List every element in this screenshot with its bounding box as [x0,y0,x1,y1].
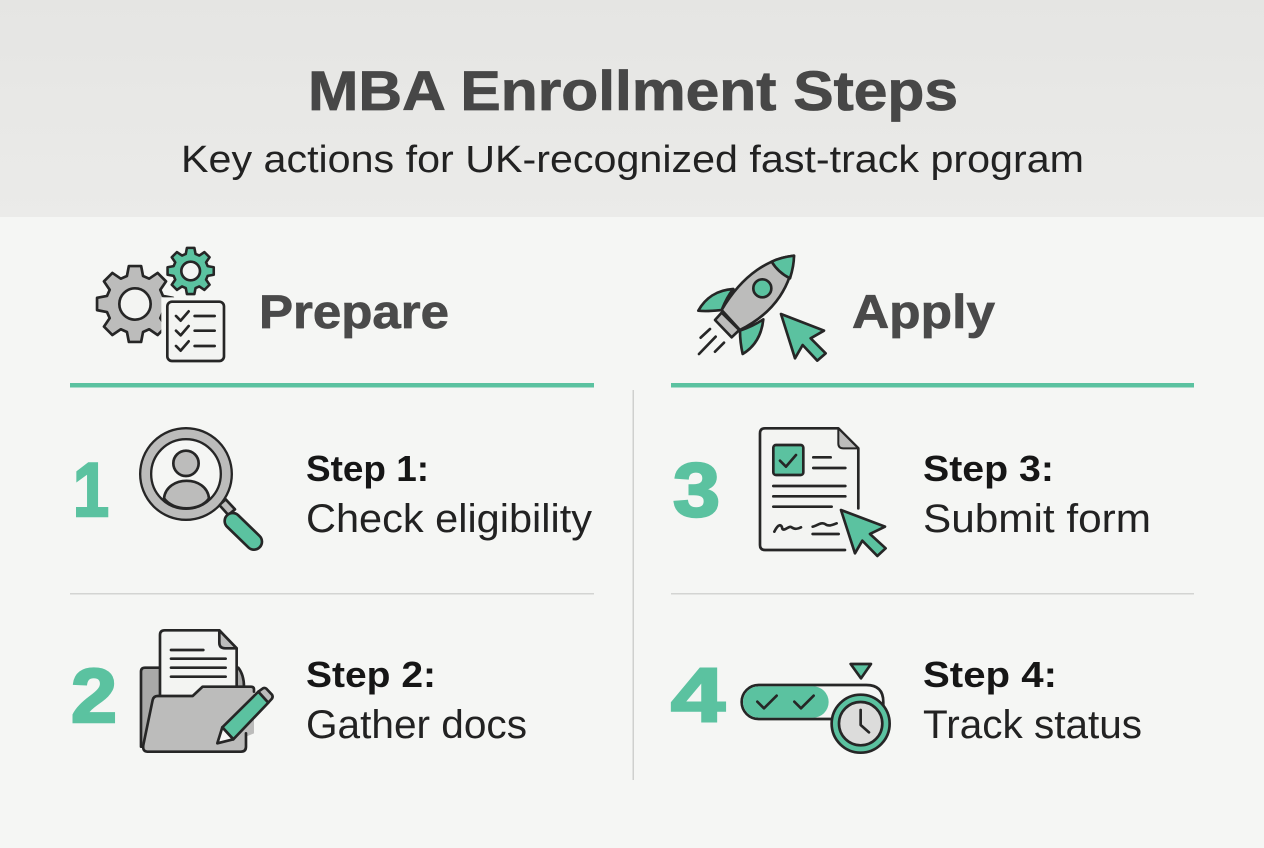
step 1: Check eligibility [306,497,592,541]
icon: rocket and cursor [698,256,826,361]
heading: Prepare: Prepare [259,285,449,338]
step 1 [73,434,592,542]
icon: magnifier with person [146,434,254,542]
step 2 [71,630,527,752]
title: MBA Enrollment Steps [308,59,958,122]
step 3: Submit form [923,497,1151,541]
number 1: 1 [73,448,109,533]
step 2: Gather docs [306,703,527,747]
step 4 [671,653,1142,753]
heading: Apply: Apply [852,285,995,338]
subtitle: Key actions for UK-recognized fast-track program [181,139,1084,181]
label: step 3: Step 3: [923,448,1054,489]
icon: progress bar and clock [742,664,890,753]
number 4: 4 [671,653,725,738]
number 3: 3 [673,448,720,533]
step 3 [673,428,1151,556]
icon: form and cursor [760,428,886,556]
label: step 4: Step 4: [923,654,1057,695]
panel: apply [698,256,995,361]
number 2: 2 [71,654,117,739]
icon: gears and checklist [97,248,228,364]
header band [0,0,1264,217]
icon: folder, document and pencil [141,630,273,752]
step 4: Track status [923,703,1142,747]
label: step 1: Step 1: [306,448,429,489]
label: step 2: Step 2: [306,654,436,695]
panel: prepare [97,248,449,364]
